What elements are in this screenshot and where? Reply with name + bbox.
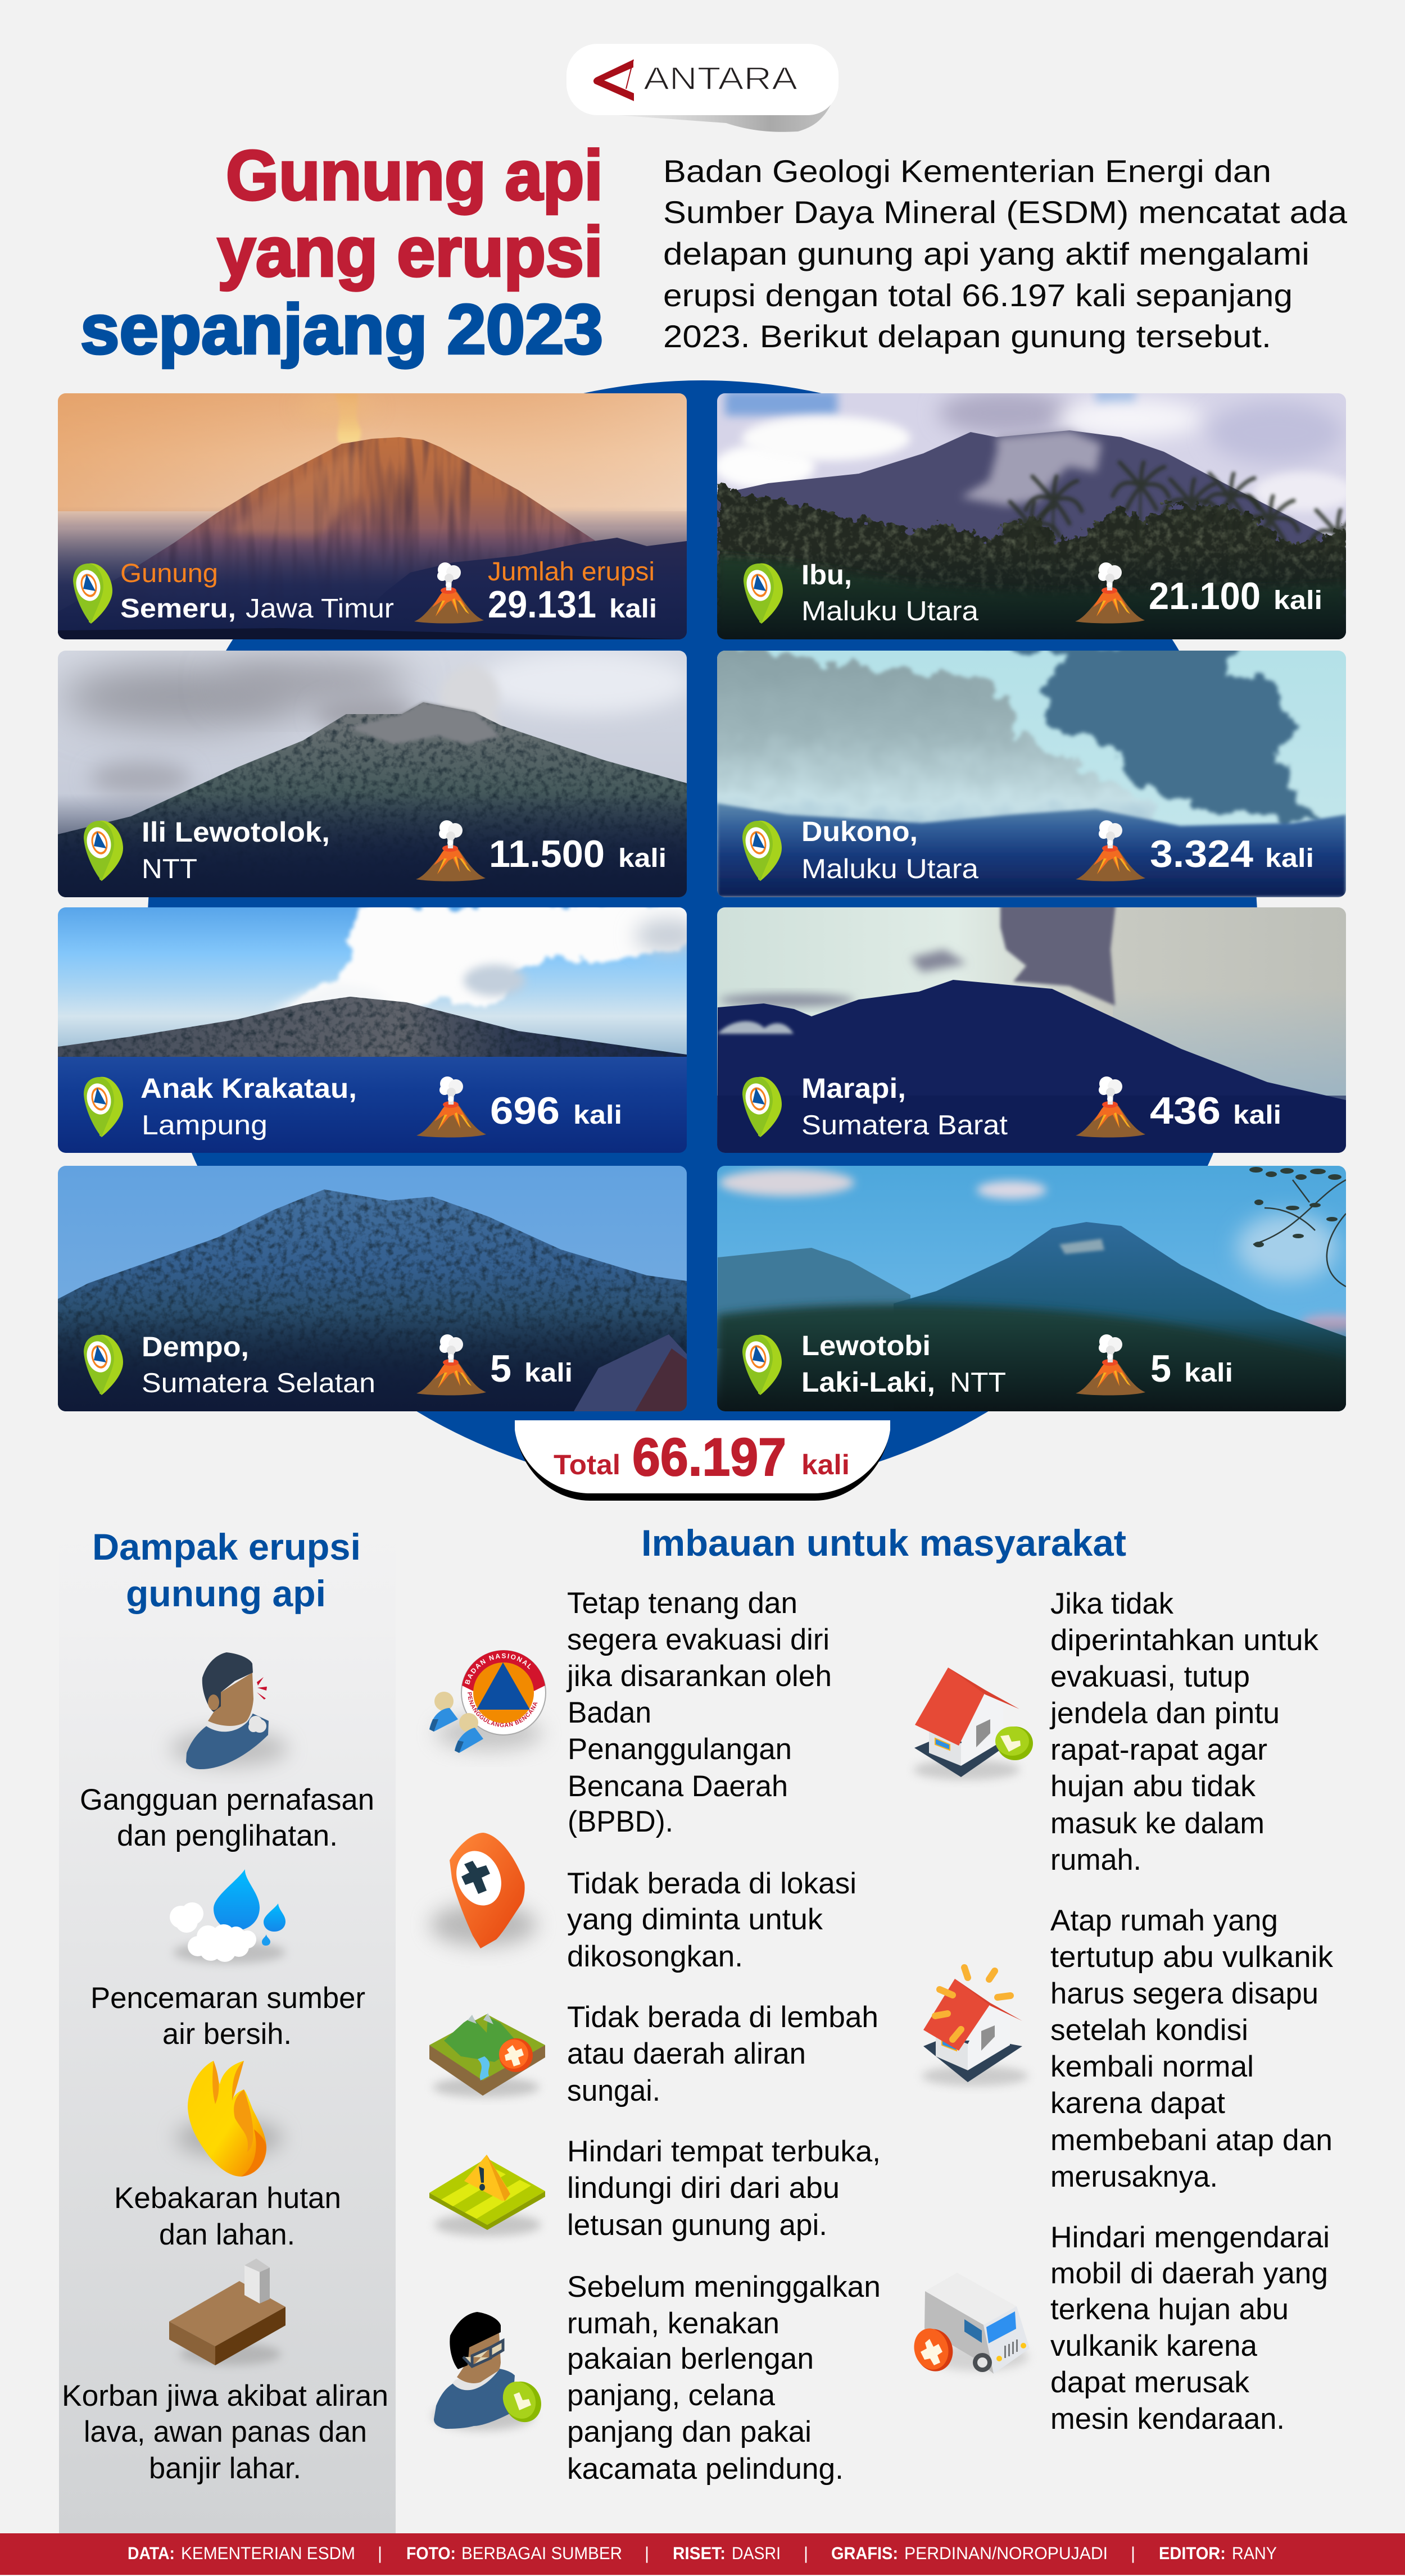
text: jika tidak: hujan abu tidak xyxy=(1050,1770,1256,1803)
eruption count: kali xyxy=(1184,1357,1233,1387)
logo badge: ANTARA xyxy=(566,44,839,132)
title xyxy=(80,137,603,369)
total badge: kali xyxy=(801,1449,850,1480)
location label: Dempo, xyxy=(142,1331,249,1362)
text: tetap tenang: jika disarankan oleh xyxy=(566,1660,832,1693)
location label xyxy=(142,1331,375,1398)
text: tetap tenang xyxy=(566,1587,832,1838)
location label: Lampung xyxy=(142,1110,268,1141)
location label xyxy=(140,1073,357,1141)
text: korban: Korban jiwa akibat aliran xyxy=(62,2379,388,2413)
text: gangguan xyxy=(80,1783,374,1852)
text: jika tidak xyxy=(1049,1587,1319,1877)
text: hindari mengendarai: dapat merusak xyxy=(1050,2366,1249,2399)
eruption count: 3.324 xyxy=(1150,833,1253,875)
icon: person with glasses xyxy=(433,2312,548,2430)
icon: water and ash xyxy=(170,1869,285,1964)
text: pencemaran: air bersih. xyxy=(162,2018,292,2051)
location label: Marapi, xyxy=(801,1073,906,1104)
text: hindari tempat xyxy=(567,2135,881,2242)
intro paragraph: 2023. Berikut delapan gunung tersebut. xyxy=(663,319,1271,354)
text: hindari tempat: Hindari tempat terbuka, xyxy=(567,2135,881,2168)
location label: Dukono, xyxy=(801,816,918,847)
location label: Laki-Laki, xyxy=(801,1366,935,1398)
icon: warning on field xyxy=(429,2155,545,2236)
eruption count xyxy=(488,556,657,626)
text: kebakaran: dan lahan. xyxy=(159,2218,295,2251)
footer credits bar: BERBAGAI SUMBER xyxy=(461,2543,622,2563)
text: sebelum: rumah, kenakan xyxy=(567,2307,779,2340)
footer credits bar: | xyxy=(1131,2543,1135,2563)
location label: Sumatera Barat xyxy=(801,1110,1008,1141)
eruption count: 5 xyxy=(490,1347,511,1390)
eruption count: kali xyxy=(609,593,657,623)
text: hindari mengendarai: vulkanik karena xyxy=(1050,2329,1258,2363)
text: hindari mengendarai xyxy=(1050,2221,1330,2436)
pin icon xyxy=(84,821,123,881)
title: Gunung api xyxy=(226,137,603,215)
text: tetap tenang: (BPBD). xyxy=(568,1805,673,1838)
footer credits bar: | xyxy=(645,2543,649,2563)
eruption count: 21.100 xyxy=(1149,575,1261,617)
card: Dempo xyxy=(58,1166,687,1411)
location label: NTT xyxy=(950,1367,1006,1398)
footer credits bar xyxy=(0,2533,1405,2575)
panel: dampak erupsi xyxy=(59,1517,396,2534)
text: atap rumah: tertutup abu vulkanik xyxy=(1050,1941,1334,1974)
location label: Lewotobi xyxy=(801,1330,931,1361)
intro paragraph: delapan gunung api yang aktif mengalami xyxy=(663,236,1309,271)
eruption count xyxy=(1150,1347,1233,1390)
text: hindari tempat: letusan gunung api. xyxy=(567,2209,827,2242)
text: tidak berada lokasi: yang diminta untuk xyxy=(567,1903,823,1936)
footer credits bar: RISET: xyxy=(673,2543,726,2563)
text: gangguan: dan penglihatan. xyxy=(117,1819,338,1852)
icon: house with check xyxy=(913,1668,1033,1780)
text: lembah: Tidak berada di lembah xyxy=(567,2001,878,2034)
footer credits bar: KEMENTERIAN ESDM xyxy=(181,2543,355,2563)
text: atap rumah: merusaknya. xyxy=(1050,2160,1218,2193)
volcano icon xyxy=(1076,1076,1145,1138)
eruption count xyxy=(490,1089,622,1132)
pin icon xyxy=(742,1077,782,1137)
location label: Sumatera Selatan xyxy=(142,1368,375,1398)
location label: Gunung xyxy=(120,558,218,588)
location label xyxy=(142,816,330,884)
eruption count xyxy=(489,833,667,875)
pin icon xyxy=(742,1335,782,1395)
location label: Maluku Utara xyxy=(801,854,979,884)
intro paragraph: erupsi dengan total 66.197 kali sepanjang xyxy=(663,278,1293,313)
eruption count: kali xyxy=(1233,1100,1281,1129)
text: tidak berada lokasi: Tidak berada di lokasi xyxy=(567,1867,856,1900)
location label: Ili Lewotolok, xyxy=(142,816,330,848)
pin icon xyxy=(84,1077,123,1137)
location label xyxy=(801,1330,1006,1398)
volcano icon xyxy=(1075,562,1145,624)
logo badge: ANTARA: ANTARA xyxy=(643,61,797,97)
pin icon xyxy=(73,564,112,624)
location label: Jawa Timur xyxy=(246,594,394,624)
eruption count: 29.131 xyxy=(488,583,596,626)
volcano icon xyxy=(1076,820,1145,882)
text: jika tidak: jendela dan pintu xyxy=(1049,1697,1280,1730)
pin icon xyxy=(84,1335,123,1395)
eruption count: kali xyxy=(573,1100,622,1129)
text: atap rumah: harus segera disapu xyxy=(1050,1977,1318,2010)
eruption count: kali xyxy=(524,1357,573,1387)
text: korban: banjir lahar. xyxy=(149,2452,301,2485)
icon: fire xyxy=(176,2061,283,2177)
text: jika tidak: evakuasi, tutup xyxy=(1050,1660,1250,1693)
card: Dukono xyxy=(697,635,1346,897)
text: hindari mengendarai: mobil di daerah yang xyxy=(1050,2257,1328,2290)
text: lembah: sungai. xyxy=(567,2074,660,2107)
text: hindari mengendarai: terkena hujan abu xyxy=(1050,2293,1289,2326)
icon: terrain with river xyxy=(429,2013,545,2097)
icon: house with ash on roof xyxy=(922,1968,1028,2086)
text: hindari mengendarai: mesin kendaraan. xyxy=(1050,2402,1285,2436)
card: Anak Krakatau xyxy=(58,899,703,1153)
location label xyxy=(801,816,979,884)
footer credits bar: RANY xyxy=(1232,2543,1277,2563)
text: tetap tenang: Badan xyxy=(568,1696,651,1729)
text: atap rumah: setelah kondisi xyxy=(1050,2014,1248,2047)
eruption count xyxy=(1149,575,1322,617)
footer credits bar: GRAFIS: xyxy=(831,2543,898,2563)
text: sebelum: panjang, celana xyxy=(567,2379,776,2412)
eruption count: 11.500 xyxy=(489,833,605,875)
eruption count: 5 xyxy=(1150,1347,1171,1390)
location label: Ibu, xyxy=(801,559,852,590)
eruption count: 696 xyxy=(490,1089,560,1132)
text: tetap tenang: segera evakuasi diri xyxy=(567,1623,830,1656)
text: sebelum: kacamata pelindung. xyxy=(567,2452,844,2486)
text: atap rumah xyxy=(1050,1904,1334,2193)
text: jika tidak: rapat-rapat agar xyxy=(1050,1733,1267,1766)
text: hindari mengendarai: Hindari mengendarai xyxy=(1050,2221,1330,2254)
eruption count xyxy=(1150,1089,1281,1132)
icon: BNPB logo with people: BADAN NASIONAL xyxy=(465,1653,531,1684)
text: tetap tenang: Bencana Daerah xyxy=(568,1770,788,1803)
text: jika tidak: masuk ke dalam xyxy=(1050,1807,1265,1840)
volcano icon xyxy=(416,820,486,882)
text: lembah: atau daerah aliran xyxy=(567,2037,806,2070)
eruption count: kali xyxy=(618,843,667,873)
text: sebelum: pakaian berlengan xyxy=(567,2342,814,2375)
pin icon xyxy=(744,564,783,624)
volcano icon xyxy=(414,562,484,624)
card: Ili Lewotolok xyxy=(58,651,691,897)
card: Lewotobi Laki-Laki xyxy=(717,1166,1363,1411)
text: jika tidak: Jika tidak xyxy=(1050,1587,1173,1620)
total badge: Total xyxy=(554,1449,620,1480)
footer credits bar: DASRI xyxy=(732,2543,781,2563)
text: pencemaran: Pencemaran sumber xyxy=(90,1982,365,2015)
text: korban xyxy=(62,2379,388,2485)
card: Ibu xyxy=(714,390,1366,639)
text: atap rumah: karena dapat xyxy=(1050,2087,1225,2120)
eruption count: kali xyxy=(1265,843,1314,873)
title: yang erupsi xyxy=(217,213,603,291)
location label xyxy=(801,1073,1008,1141)
total badge xyxy=(515,1420,890,1501)
location label: Anak Krakatau, xyxy=(140,1073,357,1104)
text: tidak berada lokasi: dikosongkan. xyxy=(567,1940,743,1973)
total badge: 66.197 xyxy=(632,1428,786,1487)
icon: car with cross xyxy=(909,2273,1030,2375)
icon: BNPB logo with people xyxy=(429,1650,546,1759)
eruption count: 436 xyxy=(1150,1089,1221,1132)
text: atap rumah: membebani atap dan xyxy=(1050,2124,1333,2157)
text: hindari tempat: lindungi diri dari abu xyxy=(567,2171,840,2205)
text: tidak berada lokasi xyxy=(567,1867,856,1973)
volcano icon xyxy=(416,1334,486,1396)
intro paragraph: Badan Geologi Kementerian Energi dan xyxy=(663,153,1271,189)
text: tetap tenang: Penanggulangan xyxy=(568,1733,792,1766)
location label xyxy=(120,558,394,624)
footer credits bar: EDITOR: xyxy=(1159,2543,1226,2563)
text: gangguan: Gangguan pernafasan xyxy=(80,1783,374,1816)
eruption count: Jumlah erupsi xyxy=(488,556,655,586)
location label: NTT xyxy=(142,854,197,884)
pin icon xyxy=(742,821,782,881)
text: sebelum: Sebelum meninggalkan xyxy=(567,2270,881,2304)
card: Semeru xyxy=(58,393,687,639)
heading: dampak xyxy=(92,1526,361,1614)
text: kebakaran xyxy=(114,2182,341,2251)
text: atap rumah: Atap rumah yang xyxy=(1050,1904,1278,1937)
text: atap rumah: kembali normal xyxy=(1050,2050,1254,2083)
icon: orange location pin xyxy=(430,1833,537,1948)
text: jika tidak: diperintahkan untuk xyxy=(1050,1624,1319,1657)
footer credits bar: FOTO: xyxy=(406,2543,456,2563)
text: pencemaran xyxy=(90,1982,365,2051)
footer credits bar: | xyxy=(378,2543,382,2563)
text: sebelum: panjang dan pakai xyxy=(567,2415,812,2448)
eruption count xyxy=(490,1347,573,1390)
heading: dampak: Dampak erupsi xyxy=(92,1526,361,1568)
heading: dampak: gunung api xyxy=(126,1573,326,1614)
intro paragraph xyxy=(663,153,1348,354)
intro paragraph: Sumber Daya Mineral (ESDM) mencatat ada xyxy=(663,194,1348,230)
eruption count: kali xyxy=(1273,585,1322,615)
text: lembah xyxy=(567,2001,878,2107)
text: korban: lava, awan panas dan xyxy=(84,2415,367,2448)
volcano icon xyxy=(416,1076,486,1138)
volcano icon xyxy=(1076,1334,1145,1396)
location label: Semeru, xyxy=(120,594,236,624)
icon: person coughing xyxy=(170,1652,288,1769)
footer credits bar: | xyxy=(804,2543,808,2563)
text: jika tidak: rumah. xyxy=(1050,1843,1141,1877)
title: sepanjang 2023 xyxy=(80,290,603,369)
footer credits bar: DATA: xyxy=(128,2543,175,2563)
location label: Maluku Utara xyxy=(801,596,979,626)
eruption count xyxy=(1150,833,1314,875)
text: sebelum xyxy=(567,2270,881,2486)
card: Marapi xyxy=(717,905,1346,1153)
icon: grave xyxy=(169,2259,285,2365)
icon: BNPB logo with people: PENANGGULANGAN BENCANA xyxy=(468,1692,537,1727)
footer credits bar: PERDINAN/NOROPUJADI xyxy=(904,2543,1108,2563)
text: kebakaran: Kebakaran hutan xyxy=(114,2182,341,2215)
blue circle backdrop xyxy=(147,380,1258,1491)
location label xyxy=(801,559,979,626)
text: tetap tenang: Tetap tenang dan xyxy=(567,1587,797,1620)
heading: imbauan: Imbauan untuk masyarakat xyxy=(641,1522,1126,1564)
